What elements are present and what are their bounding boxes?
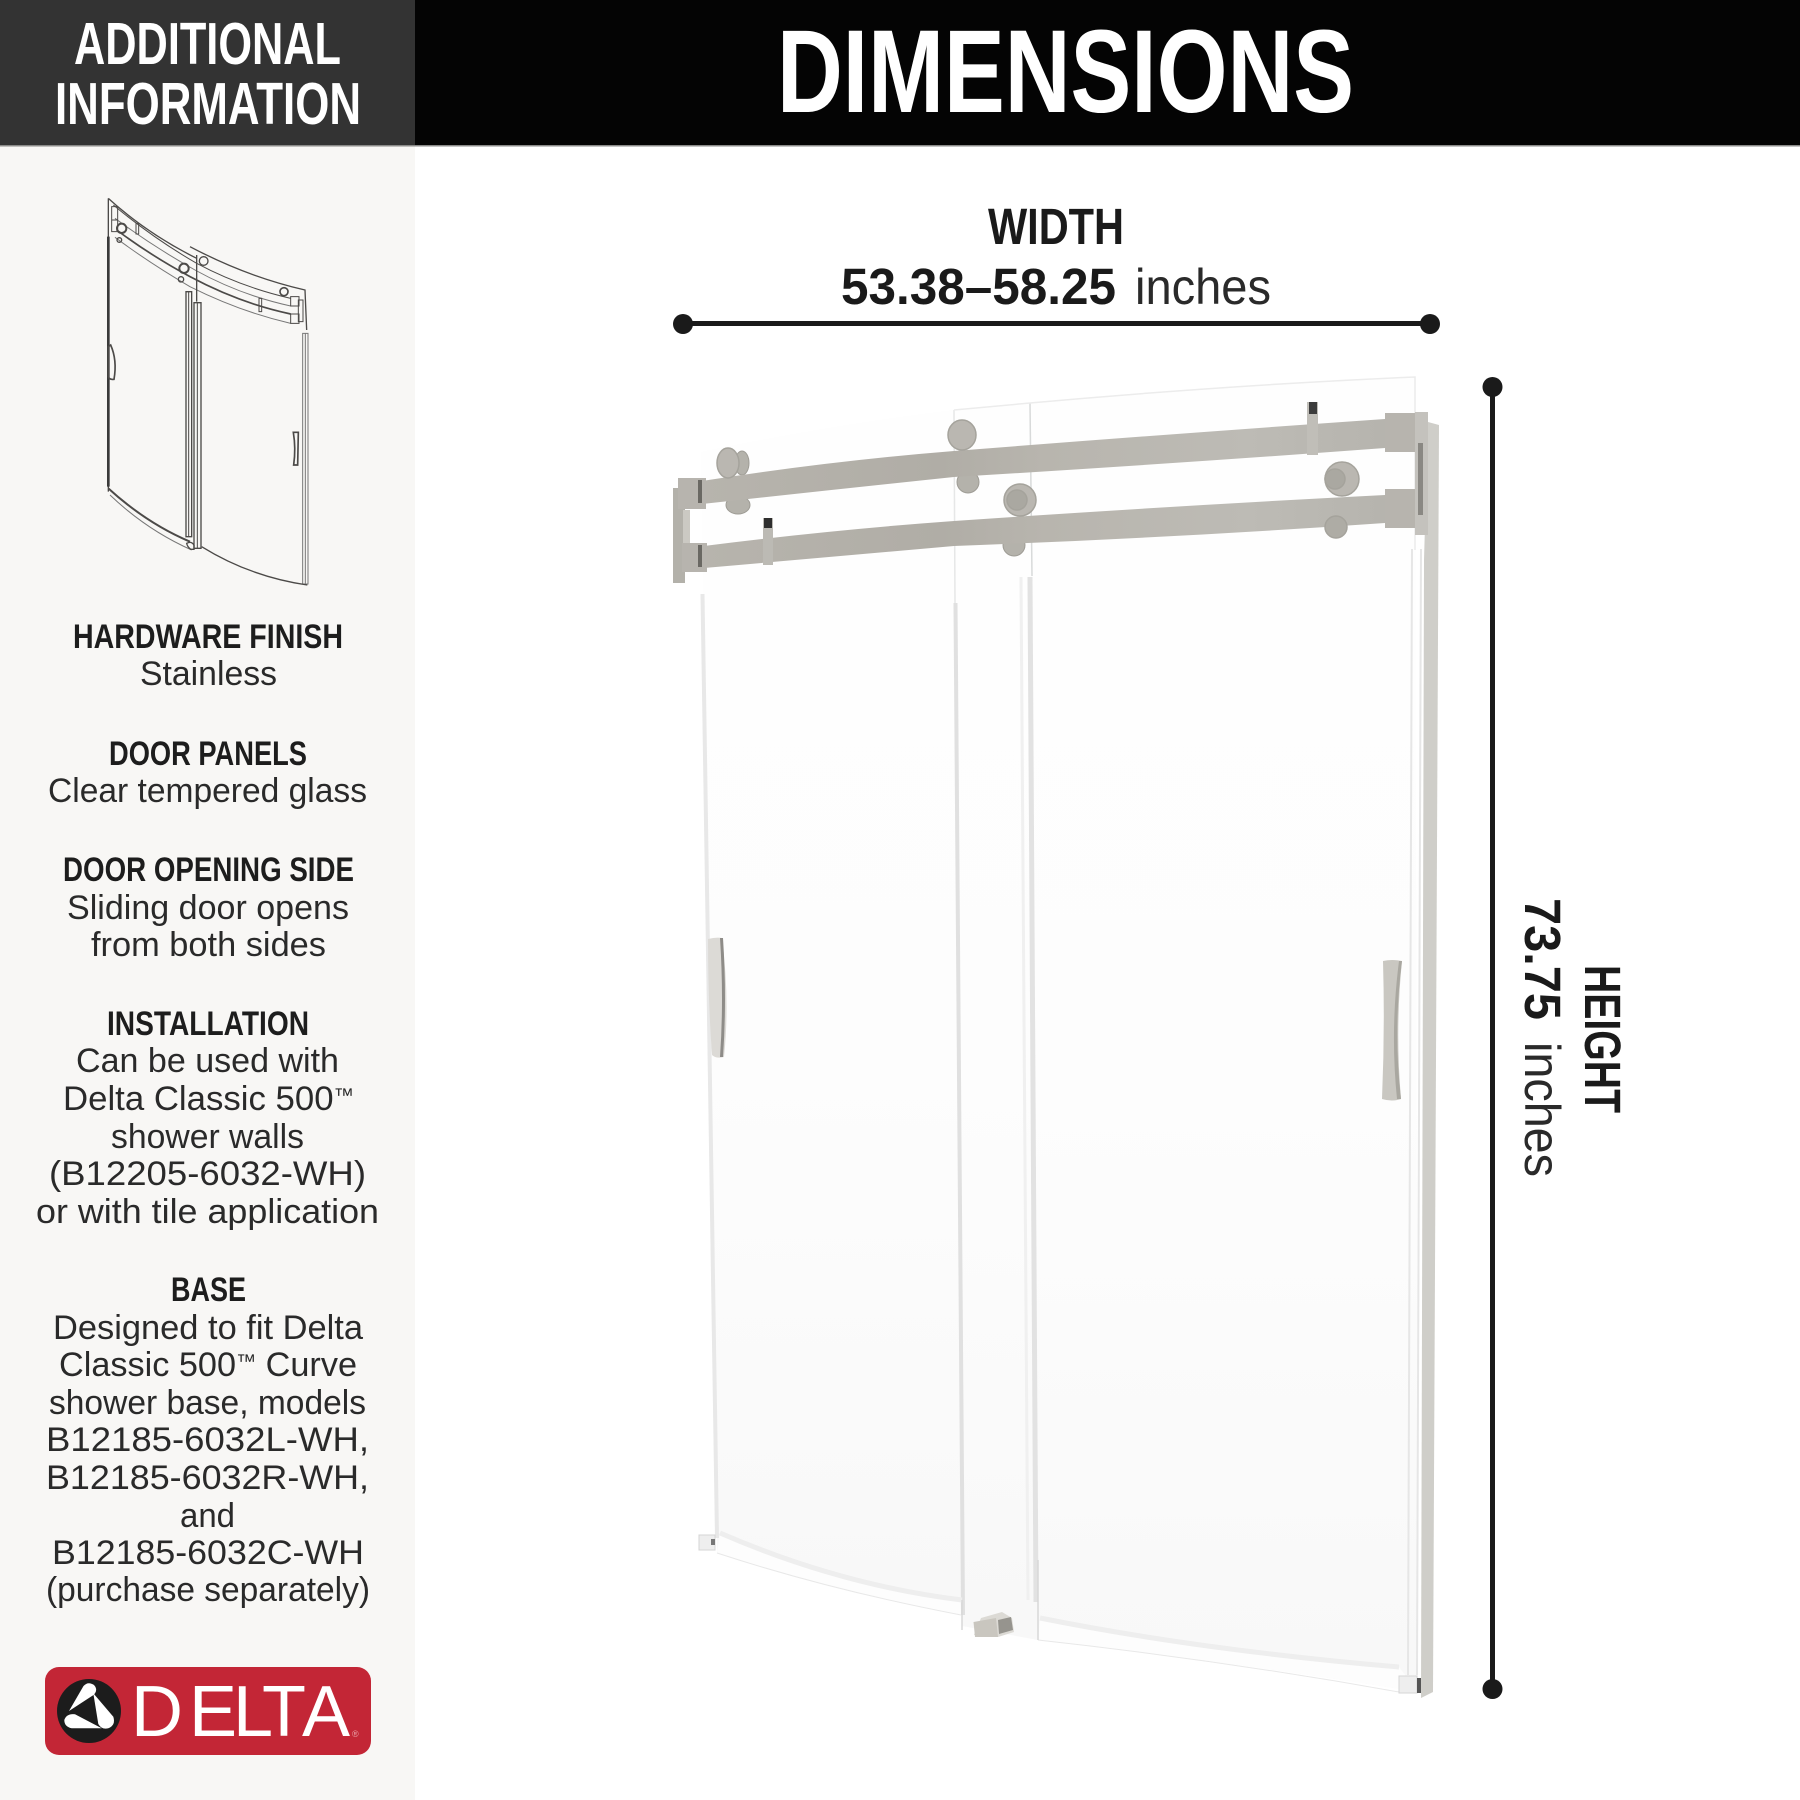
spec: hardware finish: Stainless [140,655,277,693]
height dimension label: HEIGHT [1574,965,1631,1113]
width dimension label [841,198,1271,315]
line drawing of shower door [108,198,308,585]
logo: Delta: ® [352,1729,359,1739]
wall jamb [1421,422,1439,1698]
height dimension label: inches [1514,1042,1570,1177]
spec: base: (purchase separately) [46,1571,370,1609]
icon: Delta triangle mark [64,1683,114,1729]
spec: base: B12185-6032C-WH [52,1534,364,1572]
spec: base: ™ [236,1351,256,1373]
spec: base: BASE [171,1271,246,1309]
spec: base: and [180,1497,235,1535]
width dimension label: WIDTH [988,198,1124,255]
width dimension label: 53.38–58.25 [841,258,1116,315]
floor guide: right [1399,1676,1421,1693]
glass panel: right fixed panel [1030,377,1418,1692]
width dimension label: inches [1135,259,1271,315]
upper rollers behind rail [726,451,1025,556]
logo: Delta: DELTA [131,1672,350,1752]
spec: base: B12185-6032L-WH, [46,1421,369,1459]
left door handle [708,938,727,1058]
height dimension label: 73.75 [1514,898,1571,1020]
spec: installation: (B12205-6032-WH) [49,1155,366,1193]
spec: door opening side: Sliding door opens [67,889,349,927]
logo: Delta [45,1667,371,1755]
right door handle [1382,960,1402,1100]
bottom rail [704,495,1385,568]
height dimension arrow [1482,377,1502,1699]
spec: door opening side [63,851,354,964]
floor guide: left [699,1535,715,1550]
spec: installation: ™ [334,1085,354,1107]
spec: base: Curve [256,1346,357,1384]
left sidebar background [0,146,415,1800]
spec: base: B12185-6032R-WH, [46,1459,369,1497]
title: dimensions: DIMENSIONS [777,6,1354,138]
spec: base [46,1271,370,1609]
spec: door panels [48,735,367,810]
spec: base: Classic 500 [59,1346,235,1384]
heading: additional information: INFORMATION [55,71,361,137]
spec: installation: INSTALLATION [107,1005,309,1043]
floor guide: centre [974,1612,1014,1637]
spec: hardware finish [73,618,343,693]
glass bottom bands [717,1533,1418,1692]
glass panel: left door [701,410,961,1615]
spec: installation: shower walls [111,1118,304,1156]
spec: base: shower base, models [49,1384,366,1422]
spec: installation: or with tile application [36,1193,379,1231]
glass edge lines [702,377,1421,1692]
spec: door panels: DOOR PANELS [109,735,307,773]
spec: base: Designed to fit Delta [53,1309,363,1347]
spec: installation: Delta Classic 500 [63,1080,328,1118]
rollers [717,420,1359,538]
top rail [702,419,1385,504]
width dimension arrow [673,314,1440,334]
spec: door panels: Clear tempered glass [48,772,367,810]
spec: hardware finish: HARDWARE FINISH [73,618,343,656]
rail brackets [673,412,1428,583]
spec: door opening side: DOOR OPENING SIDE [63,851,354,889]
height dimension label [1514,898,1631,1177]
header bar [0,0,1800,146]
glass panel: centre overlap [954,403,1038,1640]
spec: door opening side: from both sides [91,926,326,964]
spec: installation [36,1005,379,1231]
spec: installation: Can be used with [76,1042,339,1080]
stoppers [763,402,1318,565]
shower door illustration [673,377,1439,1698]
heading: additional information [55,11,361,137]
heading: additional information: ADDITIONAL [74,11,341,77]
